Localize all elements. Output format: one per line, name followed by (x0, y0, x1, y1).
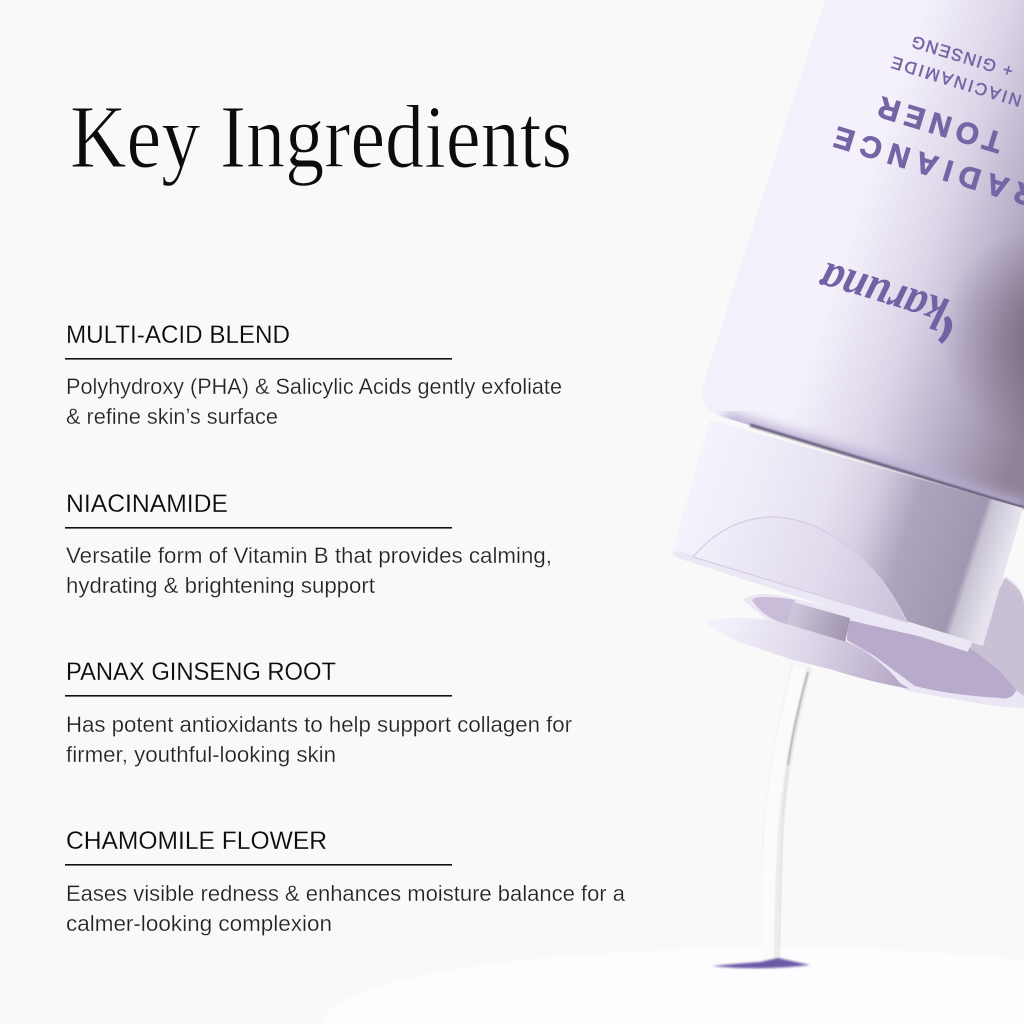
ingredient: chamomile flower: CHAMOMILE FLOWER (66, 827, 327, 855)
white surface (320, 948, 1024, 1024)
ingredient: multi-acid blend: & refine skin’s surface (66, 404, 278, 429)
bottle base shading (723, 420, 1024, 510)
liquid stream (767, 665, 808, 962)
ingredient: chamomile flower: Eases visible redness & enhances moisture balance for a (66, 881, 626, 906)
cap arch detail (693, 517, 907, 622)
label: product name: + GINSENG (909, 32, 1015, 81)
bottle body (702, 0, 1024, 508)
bottle neck (787, 602, 850, 642)
ingredient: panax ginseng root: Has potent antioxidants to help support collagen for (66, 712, 572, 737)
ingredient: niacinamide: hydrating & brightening support (66, 573, 375, 598)
label: product name: NIACINAMIDE (889, 52, 1024, 110)
liquid puddle (712, 958, 810, 968)
ingredient: multi-acid blend (65, 321, 562, 429)
toner bottle (672, 0, 1024, 708)
ingredient: panax ginseng root: PANAX GINSENG ROOT (66, 658, 336, 686)
bottle underside left (752, 597, 795, 625)
bottle underside right (847, 620, 1016, 698)
label: product name (830, 32, 1024, 213)
title: Key Ingredients (70, 88, 572, 187)
cap (672, 420, 1023, 646)
ingredient: chamomile flower (65, 827, 626, 936)
ingredient: panax ginseng root (65, 658, 572, 767)
bottle side wall (970, 578, 1024, 696)
bottle rim disk (743, 577, 1024, 708)
ingredient: niacinamide: Versatile form of Vitamin B that provides calming, (66, 543, 552, 568)
bottle base shadow line (750, 425, 1024, 508)
dispenser flange (705, 618, 910, 689)
ingredient: niacinamide (65, 490, 552, 598)
label: brand logo: karuna (814, 251, 953, 340)
ingredient: chamomile flower: calmer-looking complexion (66, 911, 332, 936)
bottle dark side shading (930, 220, 1024, 450)
ingredient list (65, 321, 626, 936)
ingredient: panax ginseng root: firmer, youthful-looking skin (66, 742, 336, 767)
ingredient: multi-acid blend: MULTI-ACID BLEND (66, 321, 290, 349)
label: product name: TONER (874, 89, 1006, 159)
ingredient: multi-acid blend: Polyhydroxy (PHA) & Salicylic Acids gently exfoliate (66, 374, 562, 399)
cap lip (672, 551, 971, 652)
ingredient: niacinamide: NIACINAMIDE (66, 490, 228, 518)
